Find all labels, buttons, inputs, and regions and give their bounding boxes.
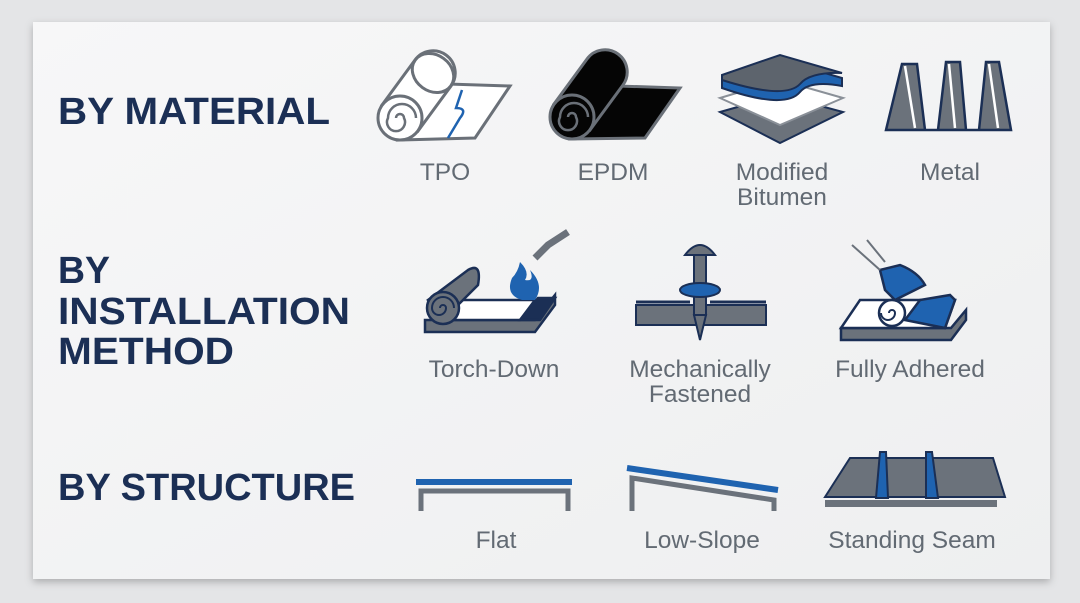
label: Modified Bitumen: Modified	[736, 159, 828, 186]
icon: mechanically fastened screw	[636, 245, 766, 340]
icon: torch-down	[425, 232, 568, 332]
icon: fully adhered	[841, 240, 966, 340]
label: Standing Seam: Standing Seam	[828, 527, 996, 554]
label: Torch-Down: Torch-Down	[429, 356, 559, 383]
icon: EPDM roll	[550, 50, 680, 139]
label: TPO: TPO	[420, 159, 470, 186]
heading: by material: BY MATERIAL	[58, 91, 330, 133]
icon: flat roof	[416, 479, 572, 511]
icon: modified bitumen layers	[720, 55, 843, 143]
label: Modified Bitumen: Bitumen	[737, 184, 827, 211]
icon: TPO roll	[378, 46, 510, 140]
heading: by structure: BY STRUCTURE	[58, 467, 355, 509]
label: Mechanically Fastened: Fastened	[649, 381, 751, 408]
heading: by installation method: INSTALLATION	[58, 291, 350, 333]
label: Metal: Metal	[920, 159, 980, 186]
heading: by installation method: METHOD	[58, 331, 234, 373]
label: Flat: Flat	[476, 527, 517, 554]
icon: standing seam	[825, 452, 1005, 507]
icon: low slope roof	[627, 468, 778, 511]
label: Mechanically Fastened: Mechanically	[629, 356, 772, 383]
label: Low-Slope: Low-Slope	[644, 527, 760, 554]
heading: by installation method	[58, 250, 350, 373]
label: Fully Adhered: Fully Adhered	[835, 356, 985, 383]
label: EPDM: EPDM	[578, 159, 648, 186]
heading: by installation method: BY	[58, 250, 110, 292]
icon: metal corrugated	[886, 62, 1011, 130]
